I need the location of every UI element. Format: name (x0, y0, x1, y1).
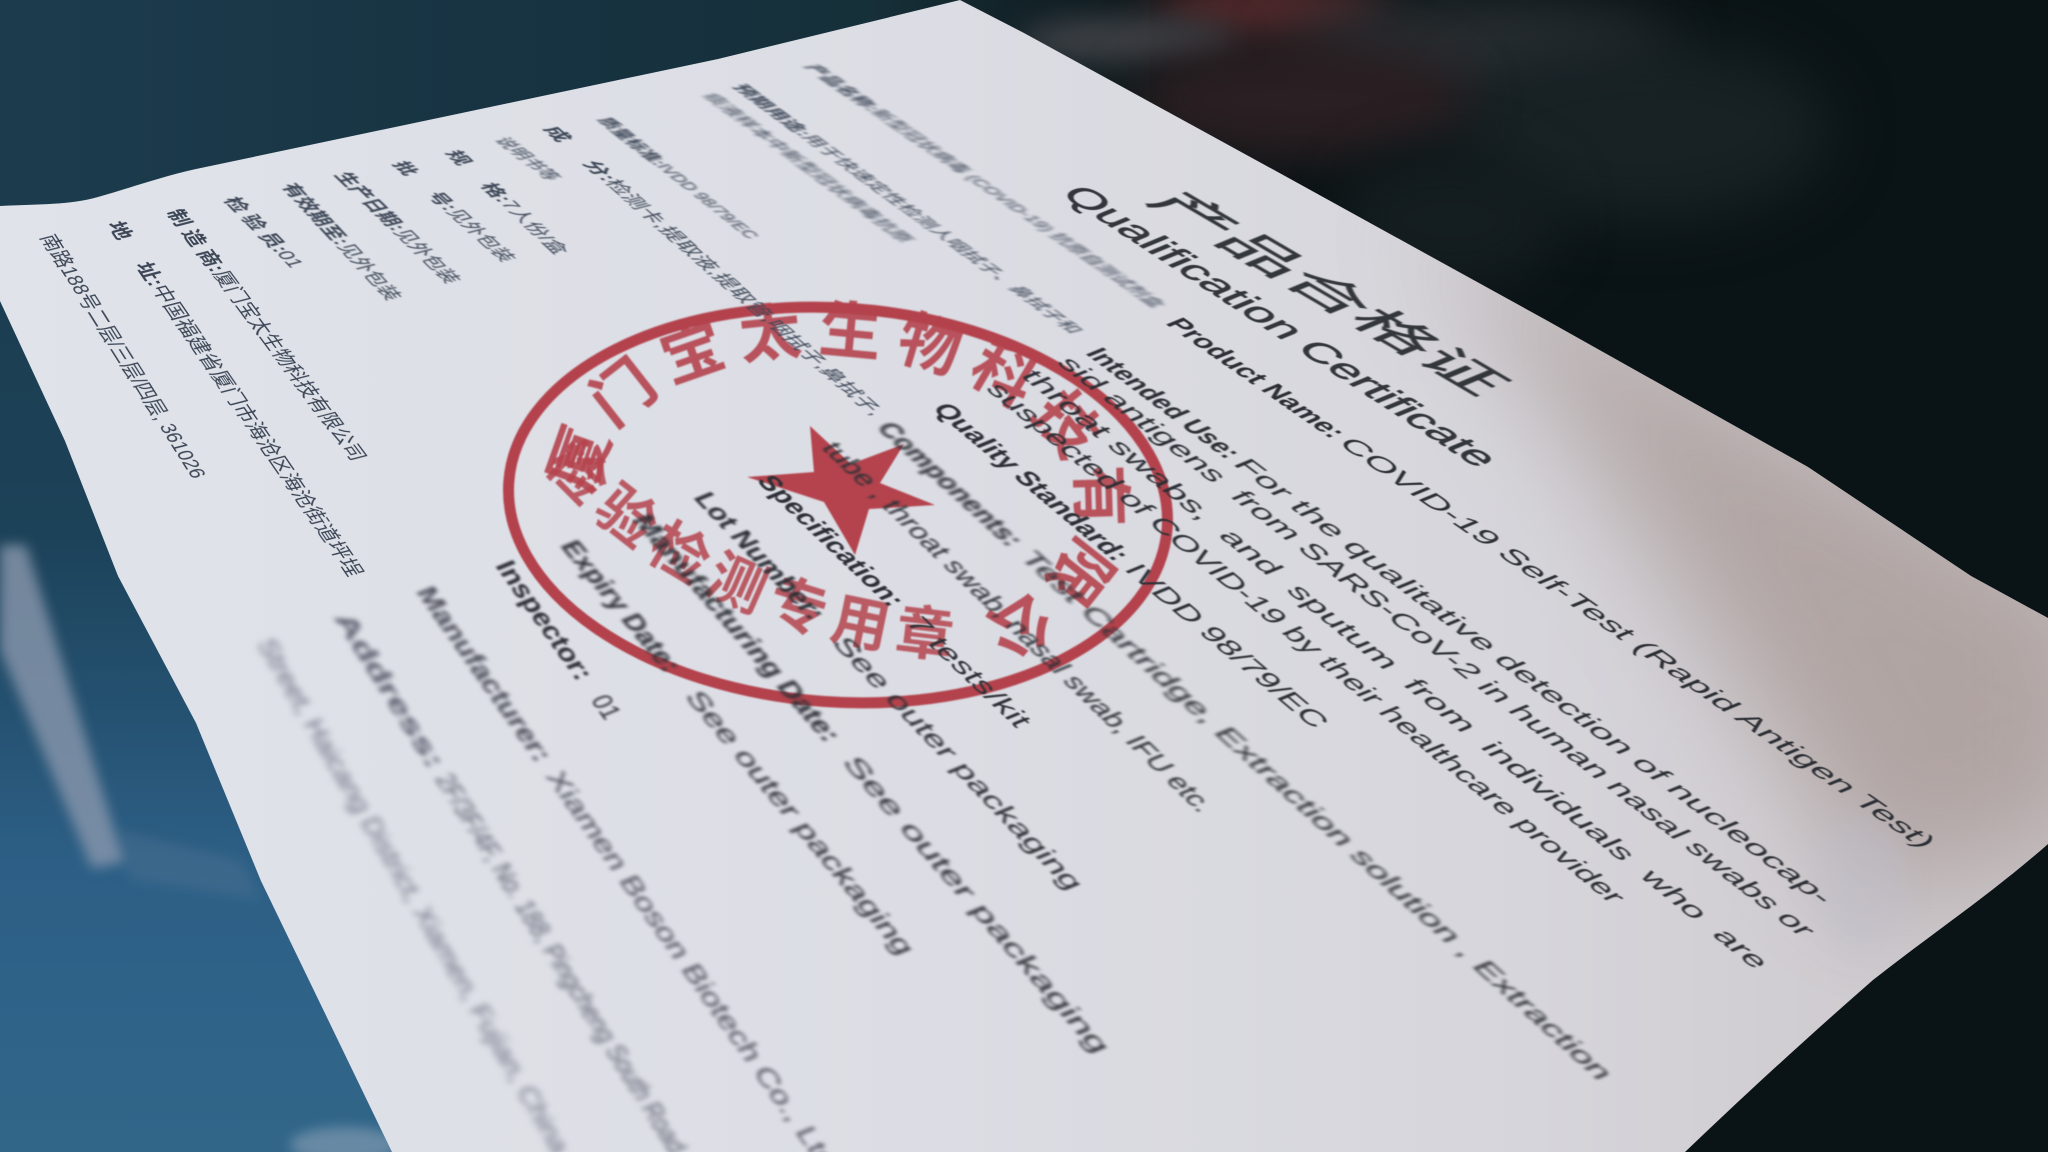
inspector: 01 (585, 691, 628, 723)
components line 1: Test Cartridge, Extraction solution , Extraction (1013, 547, 1621, 1083)
lot number: Lot Number: (687, 488, 833, 623)
Chinese: quality standard: 质量标准:IVDD 98/79/EC (594, 115, 764, 240)
title: English: Qualification Certificate (1052, 181, 1508, 472)
components line 2: tube , throat swab, nasal swab, IFU etc. (815, 438, 1222, 816)
manufacturing date: Manufacturing Date: (626, 510, 848, 745)
components line 1 (870, 418, 1621, 1083)
specification: 7 tests/kit (899, 613, 1039, 731)
quality standard (926, 399, 1336, 732)
manufacturer (410, 582, 850, 1152)
Chinese: components: 成 分: 检测卡,提取液,提取管,咽拭子,鼻拭子, (539, 124, 890, 418)
stamp star (747, 426, 935, 555)
inspector: Inspector: (489, 556, 600, 684)
expiry date: Expiry Date: (554, 536, 688, 676)
Chinese: address: 地 址:中国福建省厦门市海沧区海沧街道坪埕 (103, 219, 367, 579)
Chinese: product name: 产品名称: 新型冠状病毒 (COVID-19) 抗原自测试剂盒 (801, 63, 1169, 309)
quality standard: IVDD 98/79/EC (1118, 560, 1336, 732)
intended use line 1 (1079, 344, 1842, 907)
intended use line 2: sid antigens from SARS-CoV-2 in human nasal swabs or (1050, 353, 1823, 940)
components line 1: Components: (870, 418, 1031, 550)
address: Address: (328, 608, 451, 772)
intended use line 1: For the qualitative detection of nucleocap- (1226, 455, 1842, 907)
specification (750, 471, 1039, 731)
product name (1159, 314, 1944, 851)
title block (1052, 181, 1522, 472)
intended use line 3: throat swabs, and sputum from individuals who are (1014, 366, 1777, 972)
Chinese: manufacturer: 制 造 商:厦门宝太生物科技有限公司 (162, 207, 370, 463)
stamp ring (495, 285, 1181, 725)
English details (251, 314, 1944, 1152)
manufacturer: Xiamen Boson Biotech Co., Ltd. (540, 767, 850, 1152)
red inspection stamp (502, 299, 1174, 710)
product name: Product Name: (1159, 314, 1353, 441)
stamp lower line (558, 452, 1000, 640)
intended use line 4: suspected of COVID-19 by their healthcare provider (979, 379, 1633, 907)
address (328, 608, 693, 1152)
address line 2: Street, Haicang District, Xiamen, Fujian, China (251, 634, 576, 1152)
Chinese: instructions: 说明书等 (490, 136, 565, 182)
Chinese: inspector: 检 验 员:01 (218, 195, 310, 270)
Chinese: intended use line 2: 痰液样本中新型冠状病毒抗原 (699, 92, 917, 244)
manufacturer: Manufacturer: (410, 582, 559, 766)
title: Chinese: 产品合格证 (1135, 184, 1522, 402)
manufacturing date (626, 510, 1118, 1057)
Chinese: expiry date: 有效期至:见外包装 (276, 181, 406, 302)
Chinese: manufacturing date: 生产日期:见外包装 (329, 170, 465, 285)
stamp company name (577, 331, 1100, 640)
intended use line 1: Intended Use: (1079, 344, 1248, 462)
expiry date: See outer packaging (679, 687, 922, 959)
lot number: See outer packaging (825, 633, 1091, 894)
manufacturing date: See outer packaging (836, 752, 1118, 1057)
Chinese: intended use: 预期用途: 用于快速定性检测人咽拭子、鼻拭子和 (729, 82, 1087, 335)
lot number (687, 488, 1091, 894)
Chinese: specification: 规 格:7人份/盒 (441, 148, 573, 256)
reflection: light streak on table (0, 545, 400, 1152)
Chinese text block (35, 63, 1169, 579)
specification: Specification: (750, 471, 912, 610)
red inspection stamp: 检验检测专用章 (545, 439, 954, 660)
quality standard: Quality Standard: (926, 399, 1137, 564)
inspector (489, 556, 628, 723)
Chinese: address line 2: 南路188号二层/三层/四层, 361026 (35, 232, 210, 481)
Chinese: lot number: 批 号:见外包装 (388, 159, 520, 264)
expiry date (554, 536, 922, 959)
product name: COVID-19 Self-Test (Rapid Antigen Test) (1332, 434, 1944, 851)
